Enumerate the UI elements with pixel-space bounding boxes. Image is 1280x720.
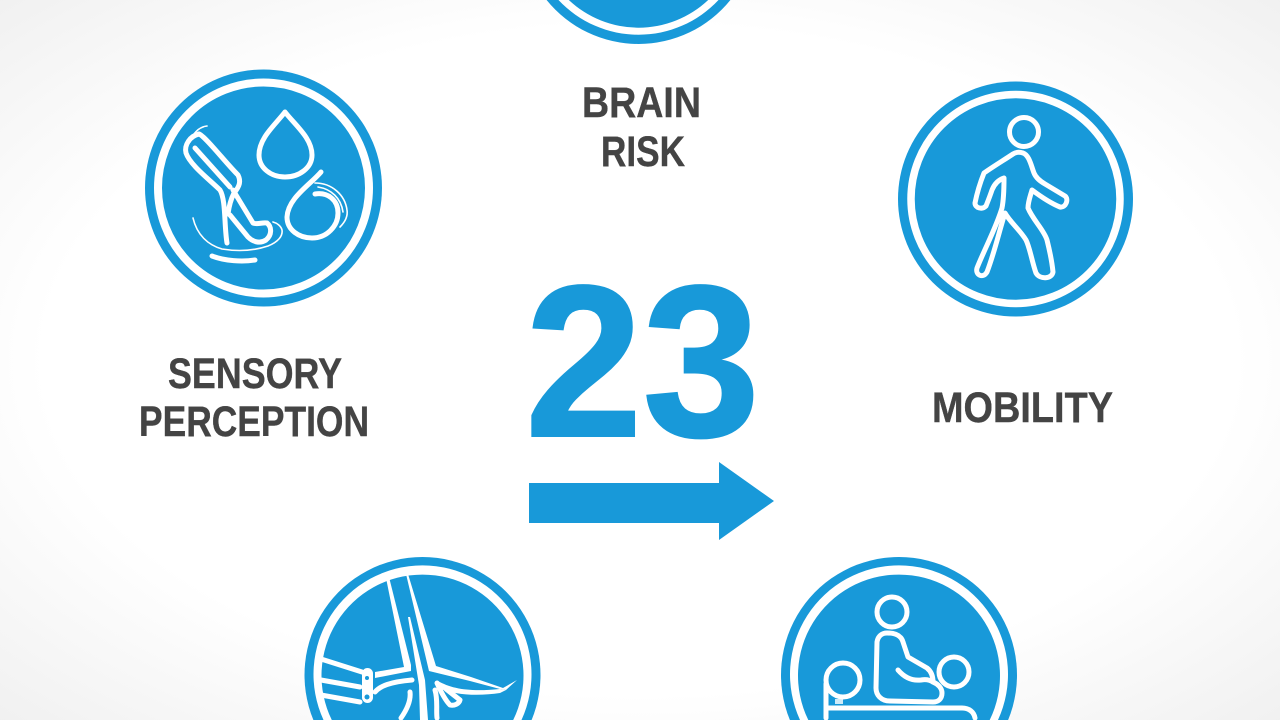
heading: sensory perception: SENSORY	[168, 350, 342, 398]
arrow	[529, 462, 774, 540]
heading: brain risk: RISK	[601, 128, 685, 176]
icon: nerve and hair badge	[304, 557, 540, 720]
heading: sensory perception: PERCEPTION	[139, 398, 369, 446]
heading: sensory perception	[139, 350, 369, 446]
heading: brain risk: BRAIN	[582, 79, 701, 127]
heading: brain risk	[582, 79, 701, 176]
heading: mobility: MOBILITY	[932, 384, 1113, 432]
icon: sensory perception badge	[145, 70, 382, 306]
icon: massage therapy badge	[781, 557, 1017, 720]
icon: brain risk badge	[547, 0, 730, 44]
icon: mobility badge	[898, 82, 1133, 316]
big number 23: 23	[525, 240, 760, 482]
